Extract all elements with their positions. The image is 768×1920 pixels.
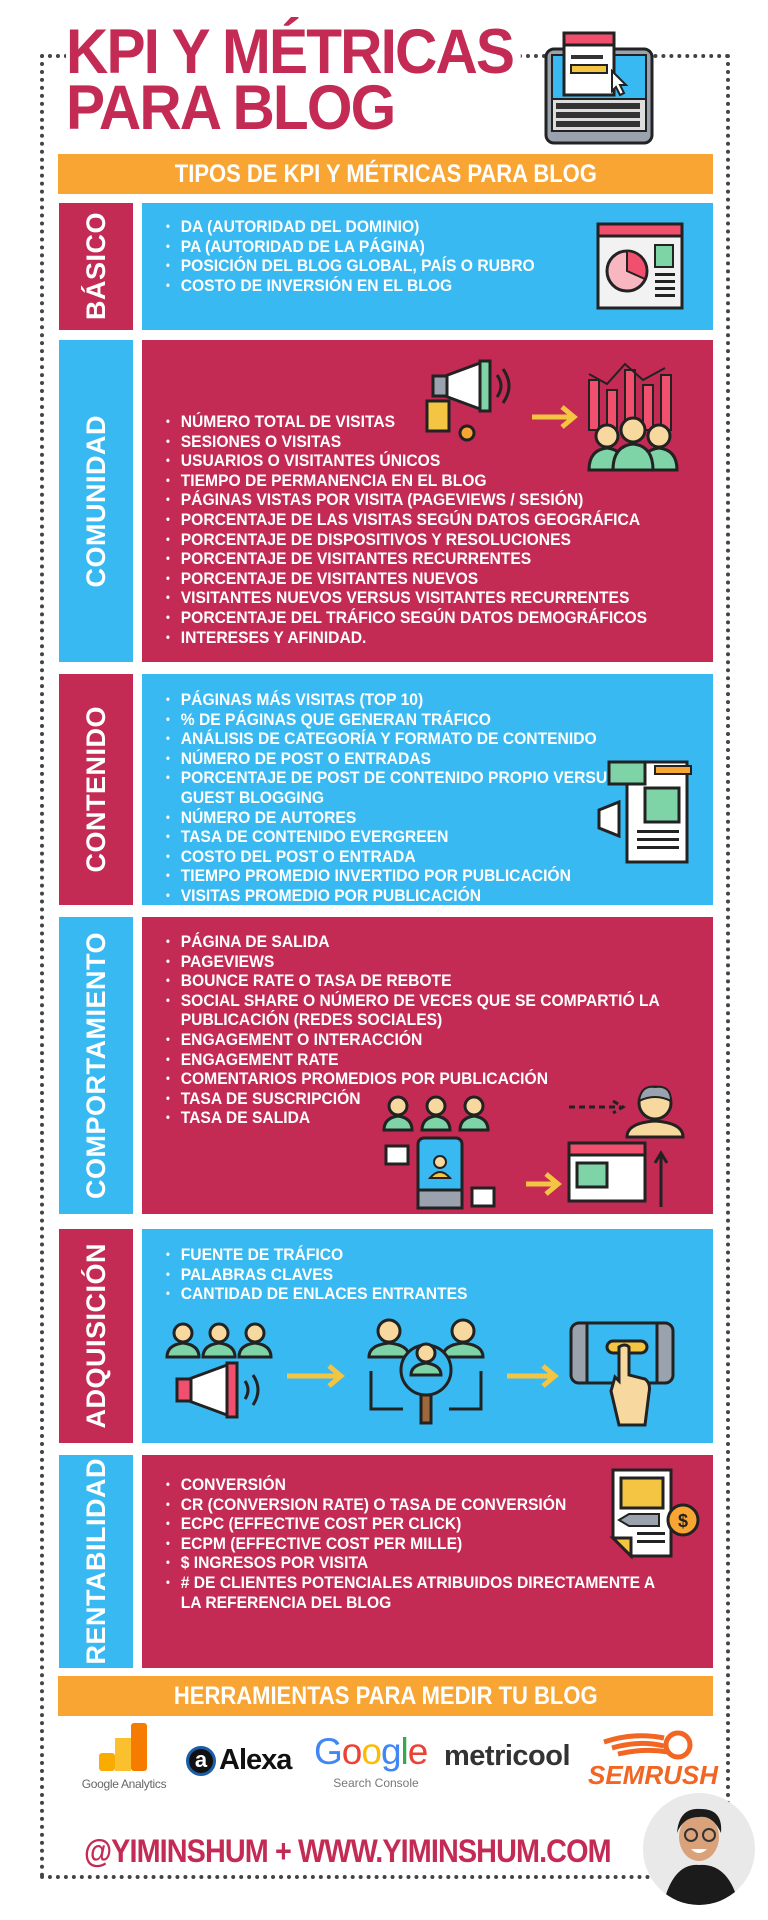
header bar: tipos: TIPOS DE KPI Y MÉTRICAS PARA BLOG (174, 160, 597, 188)
content: comportamiento: ENGAGEMENT O INTERACCIÓN (181, 1030, 422, 1049)
content: comunidad: PORCENTAJE DE LAS VISITAS SEGÚN DATOS GEOGRÁFICA (181, 510, 640, 529)
content: comportamiento: TASA DE SUSCRIPCIÓN (181, 1089, 361, 1108)
content: comportamiento: ENGAGEMENT RATE (181, 1050, 339, 1069)
logo: semrush: SEMRUSH (588, 1760, 718, 1790)
content: adquisición (142, 1229, 713, 1443)
content: comunidad: TIEMPO DE PERMANENCIA EN EL BLOG (181, 471, 487, 490)
title: KPI Y MÉTRICAS (66, 17, 513, 87)
panel: básico (59, 203, 713, 330)
content: comunidad: VISITANTES NUEVOS VERSUS VISITANTES RECURRENTES (181, 588, 629, 607)
logo: google analytics: Google Analytics (82, 1777, 166, 1791)
logo: metricool: metricool (444, 1740, 570, 1772)
content: comunidad: PORCENTAJE DEL TRÁFICO SEGÚN DATOS DEMOGRÁFICOS (181, 608, 647, 627)
content: comunidad: PORCENTAJE DE VISITANTES NUEVOS (181, 569, 478, 588)
content: adquisición: FUENTE DE TRÁFICO (181, 1245, 343, 1264)
icon: megaphone (426, 360, 510, 442)
content: comportamiento: PAGEVIEWS (181, 952, 274, 971)
icon: user exit browser (568, 1086, 684, 1207)
content: contenido: NÚMERO DE AUTORES (181, 808, 356, 827)
content: rentabilidad: ECPC (EFFECTIVE COST PER CLICK) (181, 1514, 461, 1533)
content: comportamiento (142, 917, 713, 1214)
content: básico: COSTO DE INVERSIÓN EN EL BLOG (181, 276, 452, 295)
content: básico: DA (AUTORIDAD DEL DOMINIO) (181, 217, 419, 236)
header bar: herramientas: HERRAMIENTAS PARA MEDIR TU BLOG (174, 1682, 597, 1710)
title (66, 24, 521, 136)
content: rentabilidad: LA REFERENCIA DEL BLOG (181, 1593, 391, 1612)
icon: invoice dollar (610, 1468, 700, 1560)
arrow (526, 1172, 562, 1196)
content: adquisición: PALABRAS CLAVES (181, 1265, 333, 1284)
content: rentabilidad: CR (CONVERSION RATE) O TASA DE CONVERSIÓN (181, 1495, 566, 1514)
icon: report chart (596, 222, 684, 310)
label: básico: BÁSICO (80, 212, 110, 320)
content: básico (142, 203, 713, 330)
logo: google search console (314, 1731, 427, 1790)
content: rentabilidad: # DE CLIENTES POTENCIALES ATRIBUIDOS DIRECTAMENTE A (181, 1573, 655, 1592)
label: comportamiento: COMPORTAMIENTO (80, 932, 110, 1199)
header bar: tipos (58, 154, 713, 194)
content: básico: PA (AUTORIDAD DE LA PÁGINA) (181, 237, 425, 256)
icon: laptop (544, 32, 654, 144)
label: contenido (59, 674, 133, 905)
content: contenido: % DE PÁGINAS QUE GENERAN TRÁFICO (181, 710, 491, 729)
content: contenido: NÚMERO DE POST O ENTRADAS (181, 749, 431, 768)
content: comunidad: USUARIOS O VISITANTES ÚNICOS (181, 451, 440, 470)
content: contenido: VISITAS PROMEDIO POR PUBLICACIÓN (181, 886, 481, 905)
content: contenido: GUEST BLOGGING (181, 788, 324, 807)
content: comportamiento: BOUNCE RATE O TASA DE REBOTE (181, 971, 452, 990)
footer handle: @YIMINSHUM + WWW.YIMINSHUM.COM (84, 1833, 611, 1869)
icon: invoice dollar: $ (678, 1511, 688, 1531)
label: comunidad (59, 340, 133, 662)
label: rentabilidad: RENTABILIDAD (80, 1458, 110, 1665)
logos (82, 1723, 718, 1791)
header bar: herramientas (58, 1676, 713, 1716)
panel: adquisición (59, 1229, 713, 1443)
logo: google search console: Google (314, 1731, 427, 1772)
content: rentabilidad: ECPM (EFFECTIVE COST PER MILLE) (181, 1534, 462, 1553)
content: contenido: ANÁLISIS DE CATEGORÍA Y FORMATO DE CONTENIDO (181, 729, 597, 748)
content: contenido (142, 674, 713, 905)
content: contenido: PÁGINAS MÁS VISITAS (TOP 10) (181, 690, 423, 709)
logo: google analytics (82, 1723, 166, 1791)
label: adquisición (59, 1229, 133, 1443)
panel: comportamiento (59, 917, 713, 1214)
icon: users and phone (382, 1096, 496, 1210)
icon: tap phone (570, 1322, 674, 1426)
content: comportamiento: COMENTARIOS PROMEDIOS POR PUBLICACIÓN (181, 1069, 548, 1088)
panel: rentabilidad (59, 1455, 713, 1668)
content: comportamiento: PÁGINA DE SALIDA (181, 932, 330, 951)
content: comunidad: NÚMERO TOTAL DE VISITAS (181, 412, 395, 431)
content: contenido: TIEMPO PROMEDIO INVERTIDO POR PUBLICACIÓN (181, 866, 571, 885)
arrow (287, 1364, 345, 1388)
content: adquisición: CANTIDAD DE ENLACES ENTRANTES (181, 1284, 467, 1303)
panel: contenido (59, 674, 713, 905)
label: contenido: CONTENIDO (80, 706, 110, 873)
content: básico: POSICIÓN DEL BLOG GLOBAL, PAÍS O RUBRO (181, 256, 535, 275)
content: comunidad: PORCENTAJE DE DISPOSITIVOS Y RESOLUCIONES (181, 530, 571, 549)
content: comunidad: PORCENTAJE DE VISITANTES RECURRENTES (181, 549, 531, 568)
content: contenido: TASA DE CONTENIDO EVERGREEN (181, 827, 448, 846)
content: comunidad: SESIONES O VISITAS (181, 432, 341, 451)
arrow (507, 1364, 559, 1388)
logo: alexa: Alexa (219, 1744, 291, 1776)
content: comportamiento: SOCIAL SHARE O NÚMERO DE VECES QUE SE COMPARTIÓ LA (181, 991, 660, 1010)
logo: alexa: a (195, 1747, 207, 1772)
content: contenido: PORCENTAJE DE POST DE CONTENIDO PROPIO VERSUS (181, 768, 618, 787)
content: comportamiento: TASA DE SALIDA (181, 1108, 310, 1127)
content: rentabilidad (142, 1455, 713, 1668)
logo: alexa (186, 1744, 293, 1776)
icon: search audience (368, 1318, 484, 1424)
logo: google search console: Search Console (333, 1776, 419, 1790)
icon: content doc (598, 760, 692, 864)
label: adquisición: ADQUISICIÓN (80, 1243, 110, 1429)
content: rentabilidad: $ INGRESOS POR VISITA (181, 1553, 368, 1572)
content: comunidad: PÁGINAS VISTAS POR VISITA (PAGEVIEWS / SESIÓN) (181, 490, 583, 509)
label: básico (59, 203, 133, 330)
photo: author (643, 1793, 755, 1905)
icon: audience megaphone (166, 1322, 272, 1418)
label: rentabilidad (59, 1455, 133, 1668)
label: comportamiento (59, 917, 133, 1214)
content: contenido: COSTO DEL POST O ENTRADA (181, 847, 416, 866)
content: comportamiento: PUBLICACIÓN (REDES SOCIALES) (181, 1010, 442, 1029)
content: rentabilidad: CONVERSIÓN (181, 1475, 286, 1494)
title: PARA BLOG (66, 73, 394, 143)
arrow (532, 405, 578, 429)
icon: audience chart (588, 362, 678, 472)
content: comunidad (142, 340, 713, 662)
content: comunidad: INTERESES Y AFINIDAD. (181, 628, 366, 647)
panel: comunidad (59, 340, 713, 662)
logo: semrush (588, 1730, 718, 1790)
label: comunidad: COMUNIDAD (80, 415, 110, 587)
